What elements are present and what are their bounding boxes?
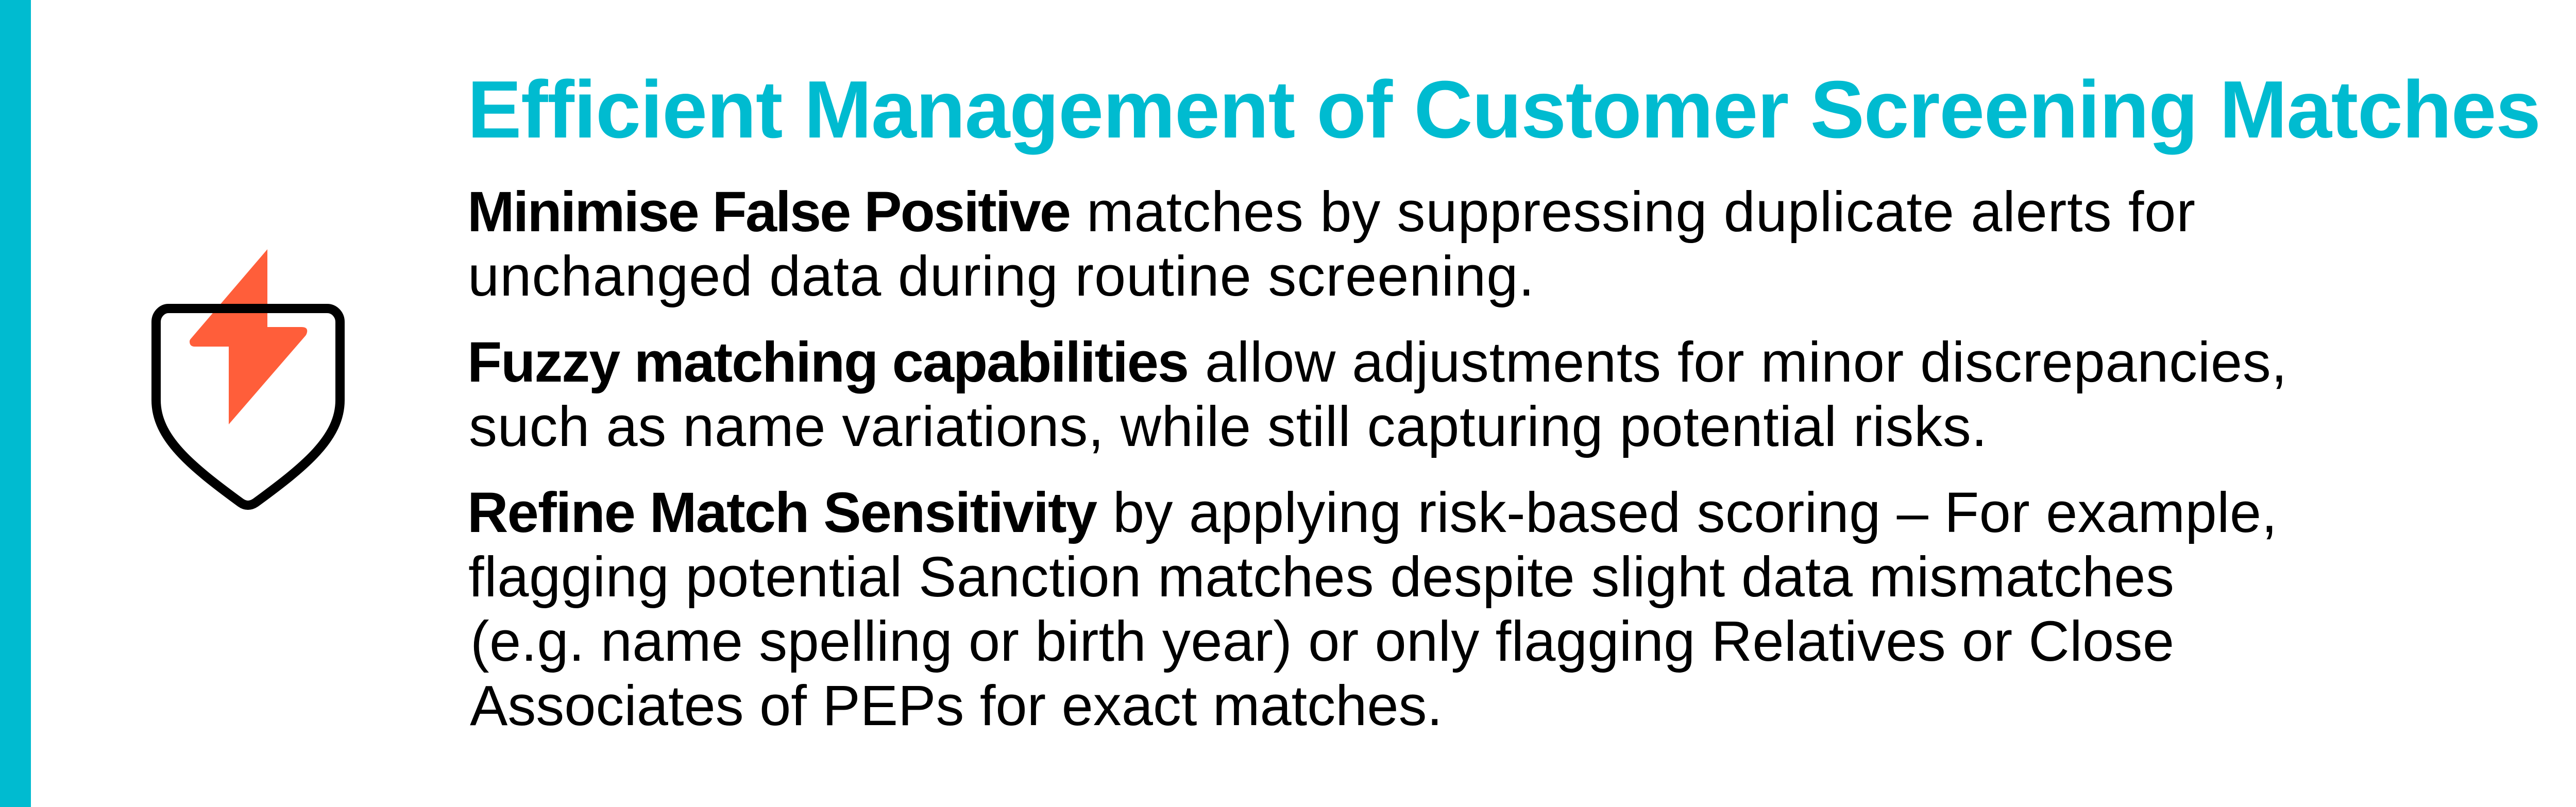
title: Efficient Management of Customer Screening Matches [467, 64, 2541, 155]
bold lead: Minimise False Positive: Minimise False Positive [467, 180, 1071, 244]
line: flagging potential: flagging potential Sanction matches despite slight data mismatches [468, 545, 2174, 609]
icon: orange lightning bolt [190, 249, 307, 424]
line: matches by suppressing: matches by suppressing duplicate alerts for [1087, 180, 2195, 244]
bold lead: Refine Match Sensitivity: Refine Match Sensitivity [467, 481, 1097, 544]
line: allow adjustments: allow adjustments for minor discrepancies, [1205, 331, 2287, 394]
left accent bar [0, 0, 31, 807]
line: unchanged data: unchanged data during routine screening. [468, 245, 1534, 308]
line: by applying risk-based scoring: by applying risk-based scoring – For example, [1113, 481, 2277, 544]
icon: shield with lightning bolt [156, 249, 340, 505]
line: Associates of PEPs: Associates of PEPs for exact matches. [470, 674, 1443, 737]
text block: fuzzy matching [467, 331, 2287, 458]
line: such as name variations: such as name variations, while still capturing potential risks. [469, 395, 1987, 458]
text block: refine match sensitivity [467, 481, 2277, 737]
bold lead: Fuzzy matching capabilities: Fuzzy matching capabilities [467, 331, 1189, 394]
line: e.g. name spelling: (e.g. name spelling or birth year) or only flagging Relatives or Close [470, 610, 2174, 673]
text block: minimise false positive [467, 180, 2195, 308]
icon: black shield outline [156, 308, 340, 505]
